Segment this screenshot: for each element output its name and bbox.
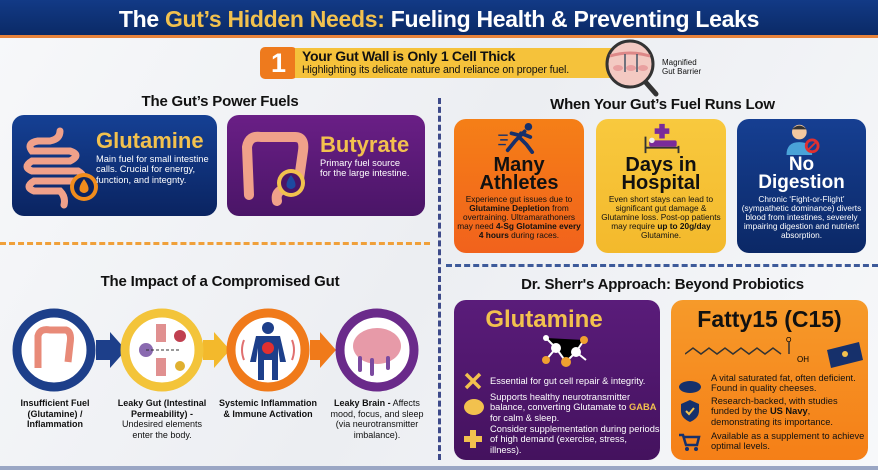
flow: compromised gut chain [12,308,418,392]
card: many athletes: Athletes [480,172,558,194]
heading: dr sherr: Dr. Sherr's Approach: Beyond Probiotics [521,276,804,293]
divider vertical [438,98,441,460]
card: glutamine approach [454,300,660,460]
banner text: Your Gut Wall is Only 1 Cell Thick [302,48,515,64]
card: days in hospital: Hospital [622,172,700,194]
label 3: Systemic Inflammation & Immune Activation [219,398,317,418]
card: fatty15: Fatty15 (C15) [697,306,842,332]
list item 1 [464,372,645,390]
card: no digestion [737,119,866,253]
card: days in hospital: Days in [625,154,697,176]
butyrate text: Butyrate [320,132,409,157]
butyrate text [320,132,409,178]
banner text: Highlighting its delicate nature and reliance on proper fuel. [302,64,569,76]
icon: molecule [542,335,588,367]
number badge: 1 [271,48,286,78]
divider right horizontal [446,264,878,267]
list item 2: Research-backed, with studies funded by the US Navy, demonstrating its importance. [711,396,838,427]
bottom border [0,466,878,470]
list item 1: A vital saturated fat, often deficient. Found in quality cheeses. [711,373,856,393]
card: days in hospital [596,119,726,253]
card: days in hospital: Even short stays can lead to significant gut damage & Glutamine loss. Post-op patients may require up to 20g/day Glutamine. [601,194,721,240]
icon: fatty acid chain and cheese: OH [797,355,809,364]
card: butyrate [227,115,425,216]
label 4: Leaky Brain - Affects mood, focus, and sleep (via neurotransmitter imbalance). [330,398,424,440]
icon: fatty acid chain and cheese: O [786,337,792,344]
card: many athletes: Experience gut issues due to Glutamine Depletion from overtraining. Ultramarathoners may need 4-Sg Glotamine every 4 hours during races. [457,194,581,240]
icon: fatty acid chain and cheese [685,337,863,368]
card: glutamine fuel [12,115,217,216]
heading: power fuels: The Gut’s Power Fuels [142,93,298,110]
divider left horizontal [0,242,430,245]
card: no digestion: No [789,154,814,175]
banner: gut wall [260,47,612,79]
magnifier label [662,58,702,76]
heading: fuel runs low: When Your Gut’s Fuel Runs Low [550,96,775,113]
heading: compromised gut: The Impact of a Compromised Gut [101,273,339,290]
icon: large intestine [242,132,308,206]
card: fatty15 [671,300,868,460]
card: no digestion: Digestion [758,172,845,193]
glutamine text: Main fuel for small intestine calls. Crucial for energy, function, and integnty. [96,154,209,185]
glutamine text [96,128,209,185]
magnifier label: Magnified [662,58,697,67]
list item 3: Consider supplementation during periods of high demand (exercise, stress, illness). [490,424,660,455]
magnifier label: Gut Barrier [662,67,701,76]
icon: small intestine [24,128,98,208]
banner text [295,48,615,78]
icon: hospital bed [644,124,680,154]
number badge [260,47,297,79]
list item 1: Essential for gut cell repair & integrity. [490,376,645,386]
butyrate text: Primary fuel source for the large intestine. [320,158,409,178]
title: The Gut’s Hidden Needs: Fueling Health & Preventing Leaks [119,6,759,32]
icon: stressed person [786,124,820,155]
header bar [0,0,878,38]
glutamine text: Glutamine [96,128,204,153]
label 2: Leaky Gut (Intestinal Permeability) - Undesired elements enter the body. [118,398,206,440]
card: no digestion: Chronic ‘Fight-or-Flight’ (sympathetic dominance) diverts blood from intestines, severely impairing digestion and nutrient absorption. [742,194,861,240]
card: glutamine approach: Glutamine [485,306,603,333]
icon: magnifier [606,40,658,96]
list item 3: Available as a supplement to achieve optimal levels. [711,431,864,451]
icon: runner [498,123,534,154]
card: many athletes: Many [493,154,545,176]
list item 2: Supports healthy neurotransmitter balance, converting Glutamate to GABA for calm & sleep. [490,392,656,423]
card: many athletes [454,119,584,253]
label 1: Insufficient Fuel (Glutamine) / Inflammation [20,398,90,429]
